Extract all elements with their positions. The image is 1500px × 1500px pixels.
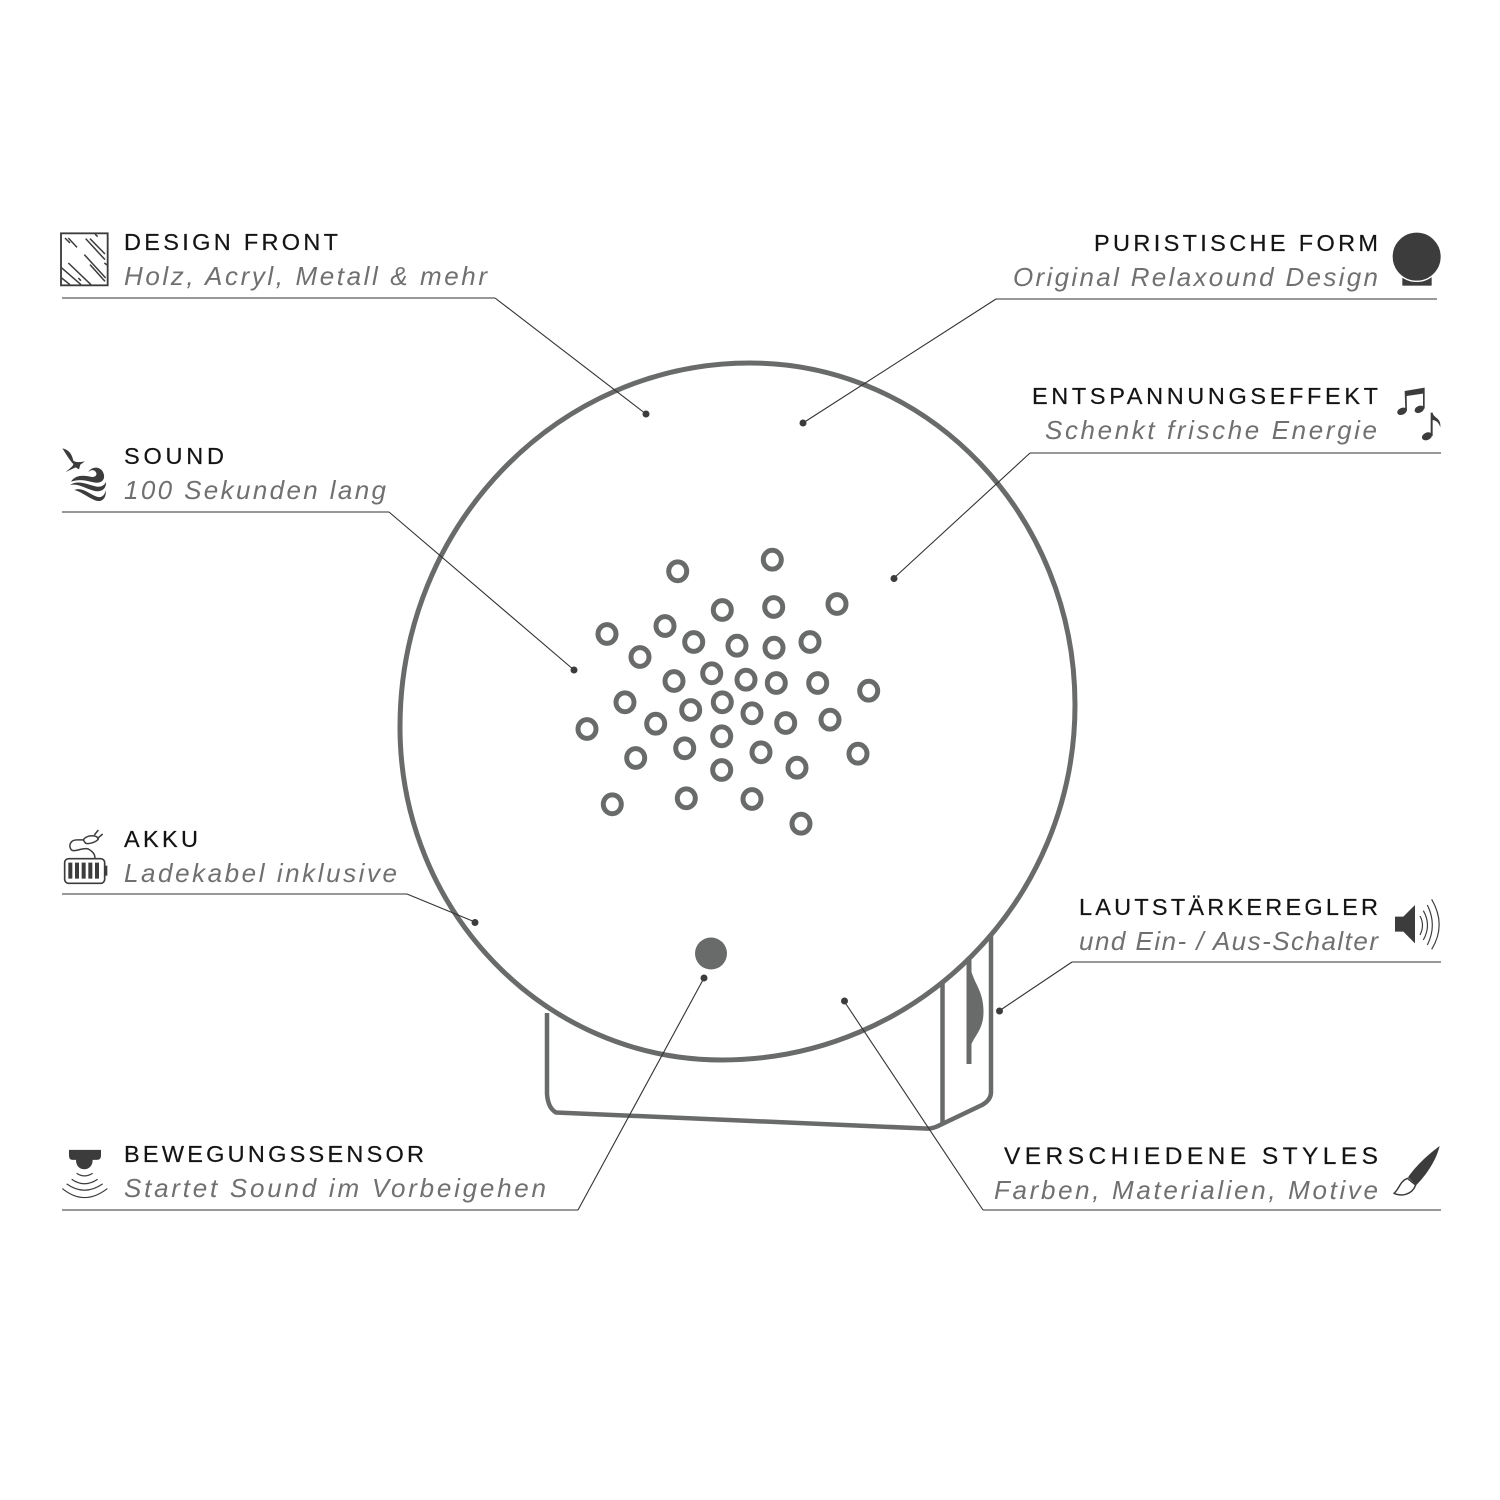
- heading: LAUTSTÄRKEREGLER: [1079, 894, 1378, 920]
- icon: paint brush: [1394, 1146, 1440, 1195]
- icon: music notes: [1396, 388, 1440, 442]
- heading: BEWEGUNGSSENSOR: [124, 1141, 424, 1167]
- description: Farben, Materialien, Motive: [994, 1175, 1378, 1205]
- heading: PURISTISCHE FORM: [1094, 230, 1378, 256]
- description: Startet Sound im Vorbeigehen: [124, 1173, 546, 1203]
- motion sensor eye: [695, 938, 727, 970]
- leader line: [800, 299, 1437, 426]
- description: Schenkt frische Energie: [1045, 415, 1377, 445]
- heading: DESIGN FRONT: [124, 229, 338, 255]
- icon: speaker with sound waves: [1395, 899, 1439, 949]
- leader line: [841, 998, 1441, 1210]
- callout: akku: [62, 826, 478, 926]
- heading: ENTSPANNUNGSEFFEKT: [1032, 383, 1378, 409]
- stand: [547, 934, 991, 1129]
- callout: sound: [62, 443, 578, 674]
- heading: AKKU: [124, 826, 198, 852]
- leader line: [62, 974, 708, 1210]
- leader line: [890, 453, 1441, 582]
- heading: VERSCHIEDENE STYLES: [1004, 1143, 1378, 1170]
- leader line: [62, 298, 650, 418]
- leader line: [996, 962, 1441, 1014]
- icon: sensor with waves: [62, 1150, 107, 1198]
- callout: puristische form: [800, 230, 1441, 426]
- description: und Ein- / Aus-Schalter: [1079, 926, 1379, 956]
- description: Holz, Acryl, Metall & mehr: [124, 261, 488, 291]
- icon: round speaker: [1392, 232, 1441, 286]
- callout: bewegungssensor: [62, 974, 708, 1210]
- callout: design front: [61, 229, 650, 418]
- description: Ladekabel inklusive: [124, 858, 397, 888]
- speaker holes: [578, 550, 878, 833]
- round front: [400, 363, 1075, 1060]
- callout: lautstaerkeregler: [996, 894, 1441, 1014]
- leader line: [62, 894, 478, 926]
- leader line: [62, 512, 578, 674]
- description: Original Relaxound Design: [1013, 262, 1378, 292]
- description: 100 Sekunden lang: [124, 475, 387, 505]
- heading: SOUND: [124, 443, 224, 469]
- icon: bird and waves: [62, 448, 106, 501]
- icon: glass square: [61, 233, 108, 285]
- product illustration: speaker: [400, 363, 1075, 1129]
- icon: battery with cable: [65, 830, 107, 883]
- callout: verschiedene styles: [841, 998, 1441, 1210]
- callout: entspannungseffekt: [890, 383, 1441, 582]
- volume wheel: [966, 951, 984, 1064]
